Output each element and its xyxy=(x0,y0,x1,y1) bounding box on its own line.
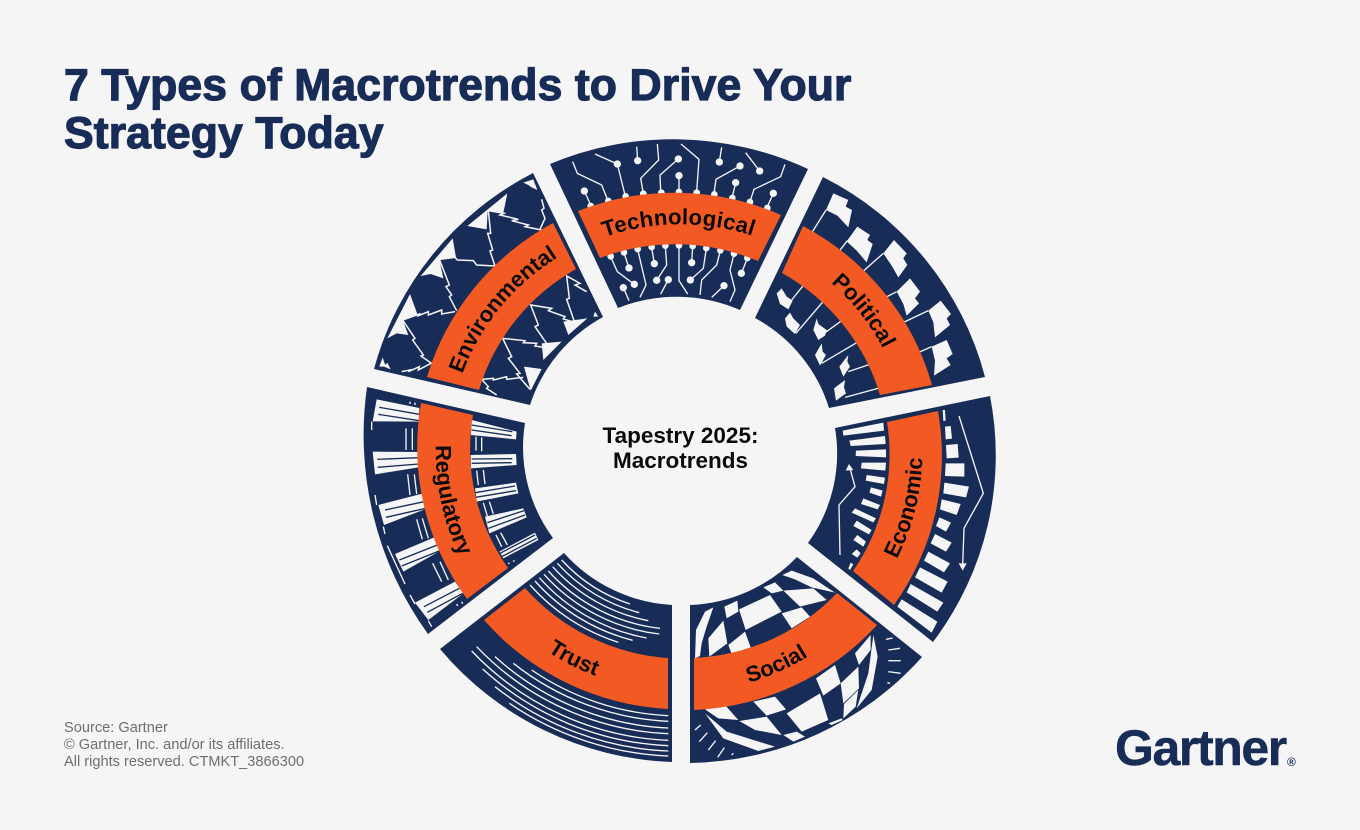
segment shape xyxy=(374,173,603,405)
orange band xyxy=(484,588,668,709)
label: Trust: Trust xyxy=(552,638,600,676)
center text xyxy=(603,423,758,473)
segment shape xyxy=(550,139,808,310)
panel: Social xyxy=(690,557,922,763)
label: Economic: Economic xyxy=(884,458,922,558)
segment shape xyxy=(690,557,922,763)
panel: Environmental xyxy=(374,173,603,405)
icon: flags xyxy=(777,193,953,401)
panel: Political xyxy=(755,177,985,408)
icon: concentric lines xyxy=(472,560,668,756)
logo: Gartner: ® xyxy=(1287,755,1296,769)
segment shape xyxy=(440,553,672,762)
segment shape xyxy=(808,396,996,642)
icon: warped checkerboard sphere xyxy=(695,571,901,757)
label: Social: Social xyxy=(746,644,807,682)
panel: Trust xyxy=(440,553,672,762)
segment shape xyxy=(364,387,553,634)
orange band xyxy=(853,411,942,605)
icon: striped columns xyxy=(372,399,538,627)
source note: Source: Gartner xyxy=(64,720,168,736)
label: Regulatory: Regulatory xyxy=(432,446,470,552)
label: Environmental: Environmental xyxy=(448,244,556,372)
icon: pine trees xyxy=(379,179,598,395)
source note: All rights reserved. CTMKT_3866300 xyxy=(64,754,304,770)
title xyxy=(64,61,851,158)
panel: Economic xyxy=(808,396,996,642)
icon: bars and arrows xyxy=(839,410,983,633)
title: Strategy Today xyxy=(64,109,384,158)
source note: © Gartner, Inc. and/or its affiliates. xyxy=(64,737,285,753)
label: Political: Political xyxy=(832,272,897,348)
panel: Technological xyxy=(550,139,808,310)
center text: Macrotrends xyxy=(613,448,748,473)
orange band xyxy=(417,403,508,599)
panel: Regulatory xyxy=(364,387,553,634)
segment shape xyxy=(755,177,985,408)
label: Technological: Technological xyxy=(600,208,756,236)
icon: circuit traces xyxy=(573,144,785,302)
center text: Tapestry 2025: xyxy=(603,423,758,448)
orange band xyxy=(578,193,781,261)
orange band xyxy=(694,593,877,710)
logo: Gartner: Gartner xyxy=(1115,720,1287,776)
orange band xyxy=(782,226,932,395)
title: 7 Types of Macrotrends to Drive Your xyxy=(64,61,851,110)
label: Trust xyxy=(552,638,600,676)
orange band xyxy=(427,223,576,390)
source note xyxy=(64,720,304,770)
